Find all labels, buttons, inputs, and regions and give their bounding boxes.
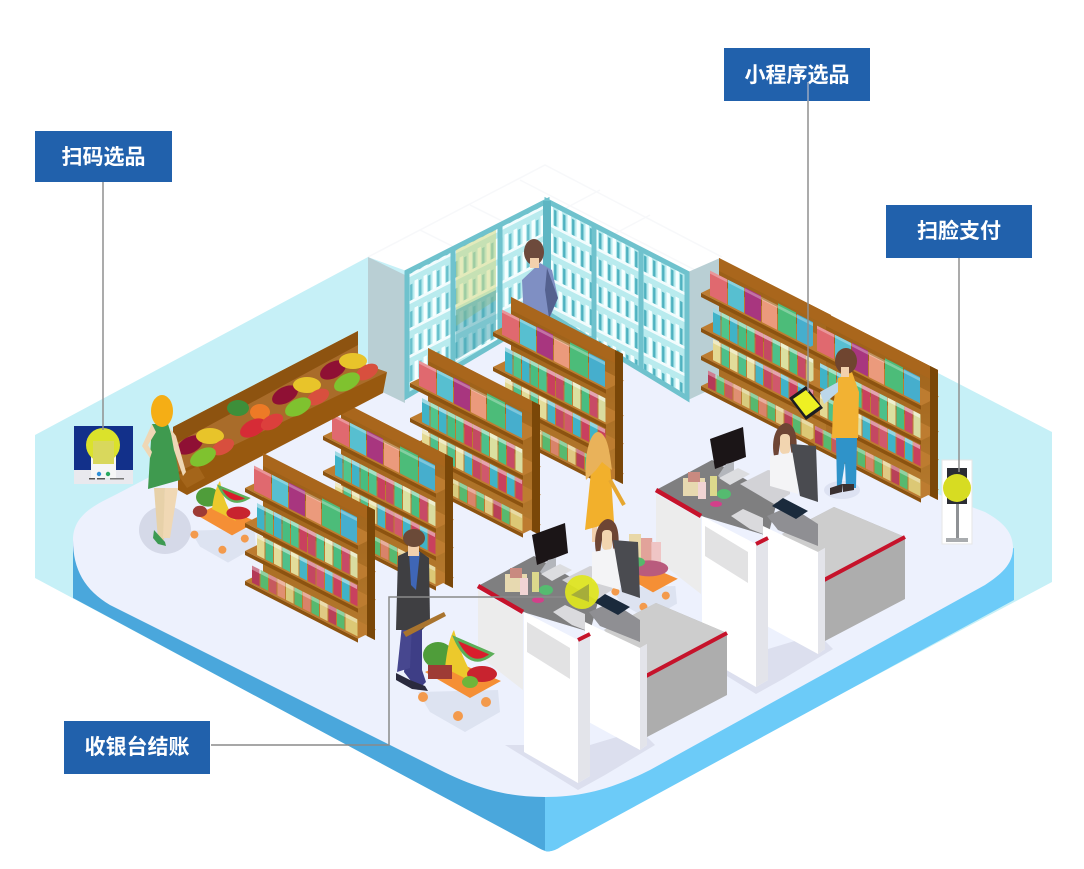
label: checkout: 收银台结账 <box>84 735 190 759</box>
platform side <box>73 540 1014 851</box>
label: face pay <box>886 205 1032 258</box>
woman in green dress <box>139 395 191 554</box>
label: mini program: 小程序选品 <box>744 64 850 87</box>
shelf unit C <box>410 348 541 547</box>
shelf unit B <box>323 401 454 600</box>
connector: scan to select <box>102 182 104 430</box>
background wall <box>35 257 1052 851</box>
label: checkout <box>64 721 210 774</box>
shopping cart middle <box>611 534 678 620</box>
tablet <box>789 386 823 420</box>
shelf unit E <box>701 258 939 512</box>
panel: refrigerated wall <box>368 200 720 403</box>
label: mini program <box>724 48 870 101</box>
shopping cart left <box>190 481 257 563</box>
checkout counter back <box>656 423 905 694</box>
person in yellow vest <box>820 348 860 499</box>
person at fridge <box>522 239 558 322</box>
label: scan to select: 扫码选品 <box>62 146 146 169</box>
label: face pay: 扫脸支付 <box>917 219 1001 243</box>
checkout counter front <box>478 519 727 790</box>
produce stand <box>173 331 387 495</box>
connector: face pay <box>958 258 960 472</box>
checkout marker <box>211 575 599 745</box>
face payment terminal <box>942 460 972 544</box>
shelf unit D <box>493 297 624 496</box>
shopping cart front <box>418 630 501 732</box>
QR code sign <box>74 426 133 484</box>
store floor <box>73 313 1013 797</box>
woman in yellow dress <box>585 432 624 542</box>
faint back grid <box>368 165 722 320</box>
man with cart <box>396 529 446 691</box>
label: scan to select <box>35 131 172 182</box>
shelf unit A <box>245 453 376 652</box>
connector: mini program <box>807 82 809 392</box>
